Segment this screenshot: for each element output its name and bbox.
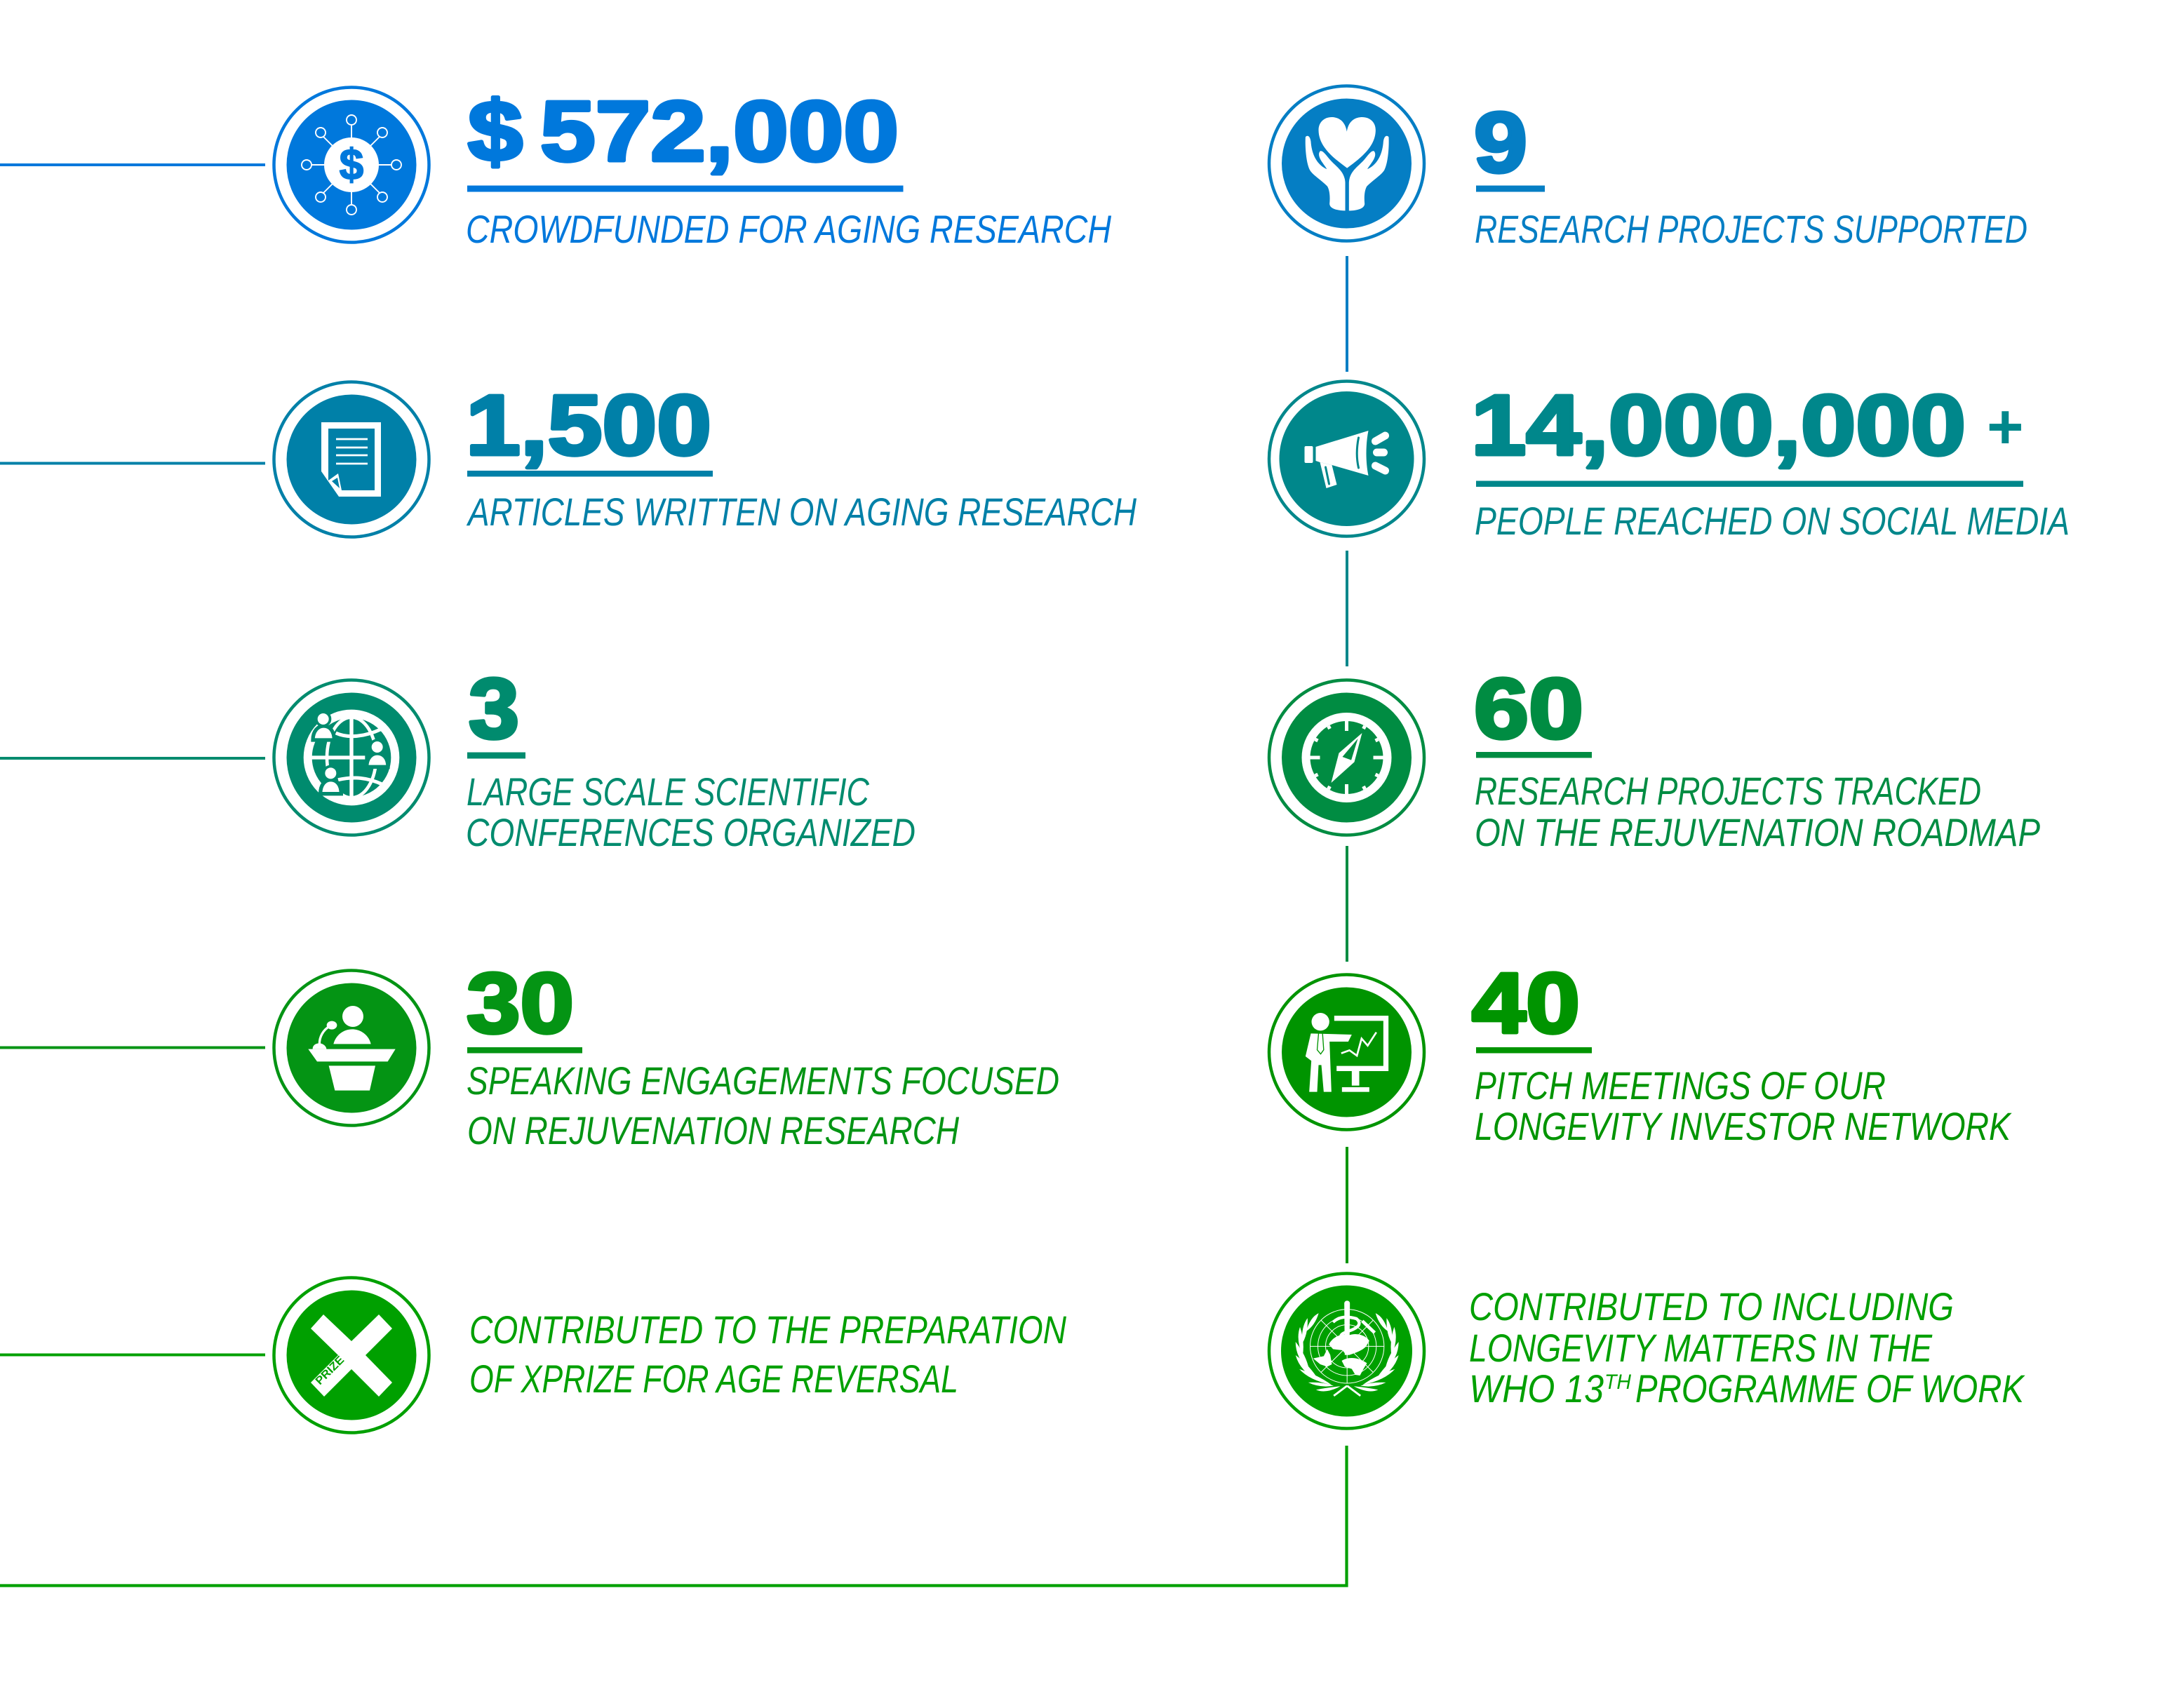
icon: WHO emblem (1269, 1274, 1424, 1428)
connector: right column segment 1 (1346, 256, 1348, 372)
description: ARTICLES WRITTEN ON AGING RESEARCH (467, 490, 1137, 534)
description: LARGE SCALE SCIENTIFIC (467, 769, 869, 814)
icon: compass (1269, 680, 1424, 835)
underline (1476, 481, 2023, 487)
underline (467, 752, 525, 759)
description: SPEAKING ENGAGEMENTS FOCUSED (467, 1058, 1059, 1103)
statistic: $ (468, 83, 523, 179)
icon: megaphone (1269, 382, 1424, 536)
connector: right column segment 3 (1346, 846, 1348, 962)
description: WHO 13 (1469, 1366, 1604, 1411)
underline (467, 471, 713, 477)
icon: globe with people (274, 680, 429, 835)
connector: row 3 left (0, 757, 265, 760)
description (467, 1058, 1059, 1152)
description: CONFERENCES ORGANIZED (466, 810, 916, 854)
panel: crowdfunded (274, 83, 1111, 251)
statistic: 572,000 (540, 83, 899, 179)
statistic: 14,000,000 (1471, 377, 1966, 473)
panel: articles (274, 377, 1137, 537)
description: CROWDFUNDED FOR AGING RESEARCH (466, 207, 1111, 251)
panel: speaking engagements (274, 955, 1059, 1152)
description: ON REJUVENATION RESEARCH (467, 1108, 959, 1152)
description: TH (1604, 1371, 1631, 1394)
connector: row 1 left (0, 163, 265, 166)
description: CONTRIBUTED TO THE PREPARATION (469, 1307, 1066, 1352)
icon: dollar network: $ (340, 141, 363, 189)
statistic: 40 (1472, 955, 1580, 1051)
description (1475, 1063, 2012, 1148)
description (1469, 1284, 2025, 1411)
connector: right column segment 4 (1346, 1147, 1348, 1263)
underline (1476, 185, 1545, 192)
icon: document (274, 382, 429, 537)
description (469, 1307, 1066, 1401)
panel: WHO programme (1269, 1274, 2025, 1428)
icon: presenter with chart (1269, 975, 1424, 1129)
underline (467, 185, 904, 192)
connector: right column segment 2 (1346, 551, 1348, 666)
description (466, 769, 916, 854)
panel: research projects supported (1269, 86, 2027, 251)
description: PITCH MEETINGS OF OUR (1475, 1063, 1886, 1108)
underline (1476, 752, 1592, 758)
description: PROGRAMME OF WORK (1635, 1366, 2025, 1411)
icon: xprize cross: PRIZE (314, 1354, 347, 1387)
icon: xprize cross (274, 1278, 429, 1432)
description: LONGEVITY MATTERS IN THE (1469, 1326, 1933, 1370)
panel: conferences (274, 661, 916, 854)
statistic: 1,500 (466, 377, 711, 473)
plus sign: + (1987, 392, 2024, 462)
panel: social media reach (1269, 377, 2070, 543)
panel: xprize (274, 1278, 1066, 1432)
connector: bottom elbow (0, 1446, 1347, 1585)
description: CONTRIBUTED TO INCLUDING (1469, 1284, 1954, 1329)
description (1475, 769, 2040, 854)
connector: row 2 left (0, 462, 265, 464)
statistic: 9 (1474, 95, 1527, 190)
description: RESEARCH PROJECTS TRACKED (1475, 769, 1981, 813)
description: OF XPRIZE FOR AGE REVERSAL (469, 1357, 958, 1401)
connector: row 4 left (0, 1047, 265, 1049)
description: RESEARCH PROJECTS SUPPORTED (1475, 207, 2027, 251)
underline (467, 1047, 582, 1054)
statistic: 30 (467, 955, 574, 1051)
description: LONGEVITY INVESTOR NETWORK (1475, 1104, 2012, 1148)
icon: hands holding heart (1269, 86, 1424, 241)
panel: pitch meetings (1269, 955, 2012, 1148)
description: ON THE REJUVENATION ROADMAP (1475, 810, 2040, 854)
icon: podium speaker (274, 971, 429, 1125)
statistic: 3 (469, 661, 519, 756)
panel: roadmap projects (1269, 661, 2040, 854)
statistic: 60 (1474, 661, 1583, 756)
icon: dollar network (274, 87, 429, 243)
underline (1476, 1047, 1592, 1054)
connector: row 5 left (0, 1354, 265, 1357)
